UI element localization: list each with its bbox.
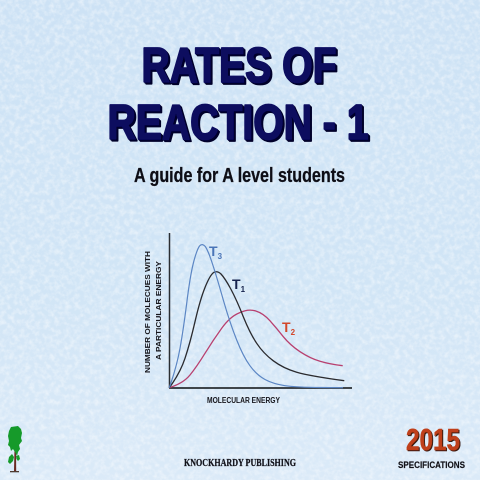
title bbox=[108, 39, 370, 152]
label T2: T bbox=[282, 319, 291, 335]
specifications label: SPECIFICATIONS bbox=[398, 460, 465, 471]
icon: tree logo bbox=[8, 426, 22, 472]
title: RATES OF bbox=[142, 39, 336, 93]
curve T2 bbox=[169, 310, 343, 388]
y axis label: NUMBER OF MOLECUES WITH bbox=[143, 251, 152, 373]
label T3: T bbox=[209, 243, 218, 259]
y axis label: A PARTICULAR ENERGY bbox=[154, 261, 163, 360]
y axis label bbox=[143, 251, 163, 373]
label T1: 1 bbox=[241, 285, 246, 294]
title: REACTION - 1 bbox=[108, 97, 370, 151]
curve T3 bbox=[169, 245, 343, 388]
title: RATES OF bbox=[144, 41, 338, 95]
title: REACTION - 1 bbox=[108, 96, 368, 150]
label T3: 3 bbox=[218, 252, 223, 261]
x axis label: MOLECULAR ENERGY bbox=[207, 396, 281, 405]
title: RATES OF bbox=[142, 40, 338, 94]
chart: molecular energy distribution bbox=[143, 233, 352, 405]
curve T1 bbox=[169, 272, 344, 388]
publisher name: KNOCKHARDY PUBLISHING bbox=[184, 458, 296, 469]
title: REACTION - 1 bbox=[110, 98, 370, 152]
subtitle: A guide for A level students bbox=[134, 164, 345, 187]
year badge: 2015 bbox=[407, 423, 461, 458]
label T2: 2 bbox=[291, 328, 296, 337]
label T1: T bbox=[232, 276, 241, 292]
y axis bbox=[168, 233, 170, 388]
x axis bbox=[169, 387, 352, 389]
year badge: 2015 bbox=[406, 422, 460, 457]
